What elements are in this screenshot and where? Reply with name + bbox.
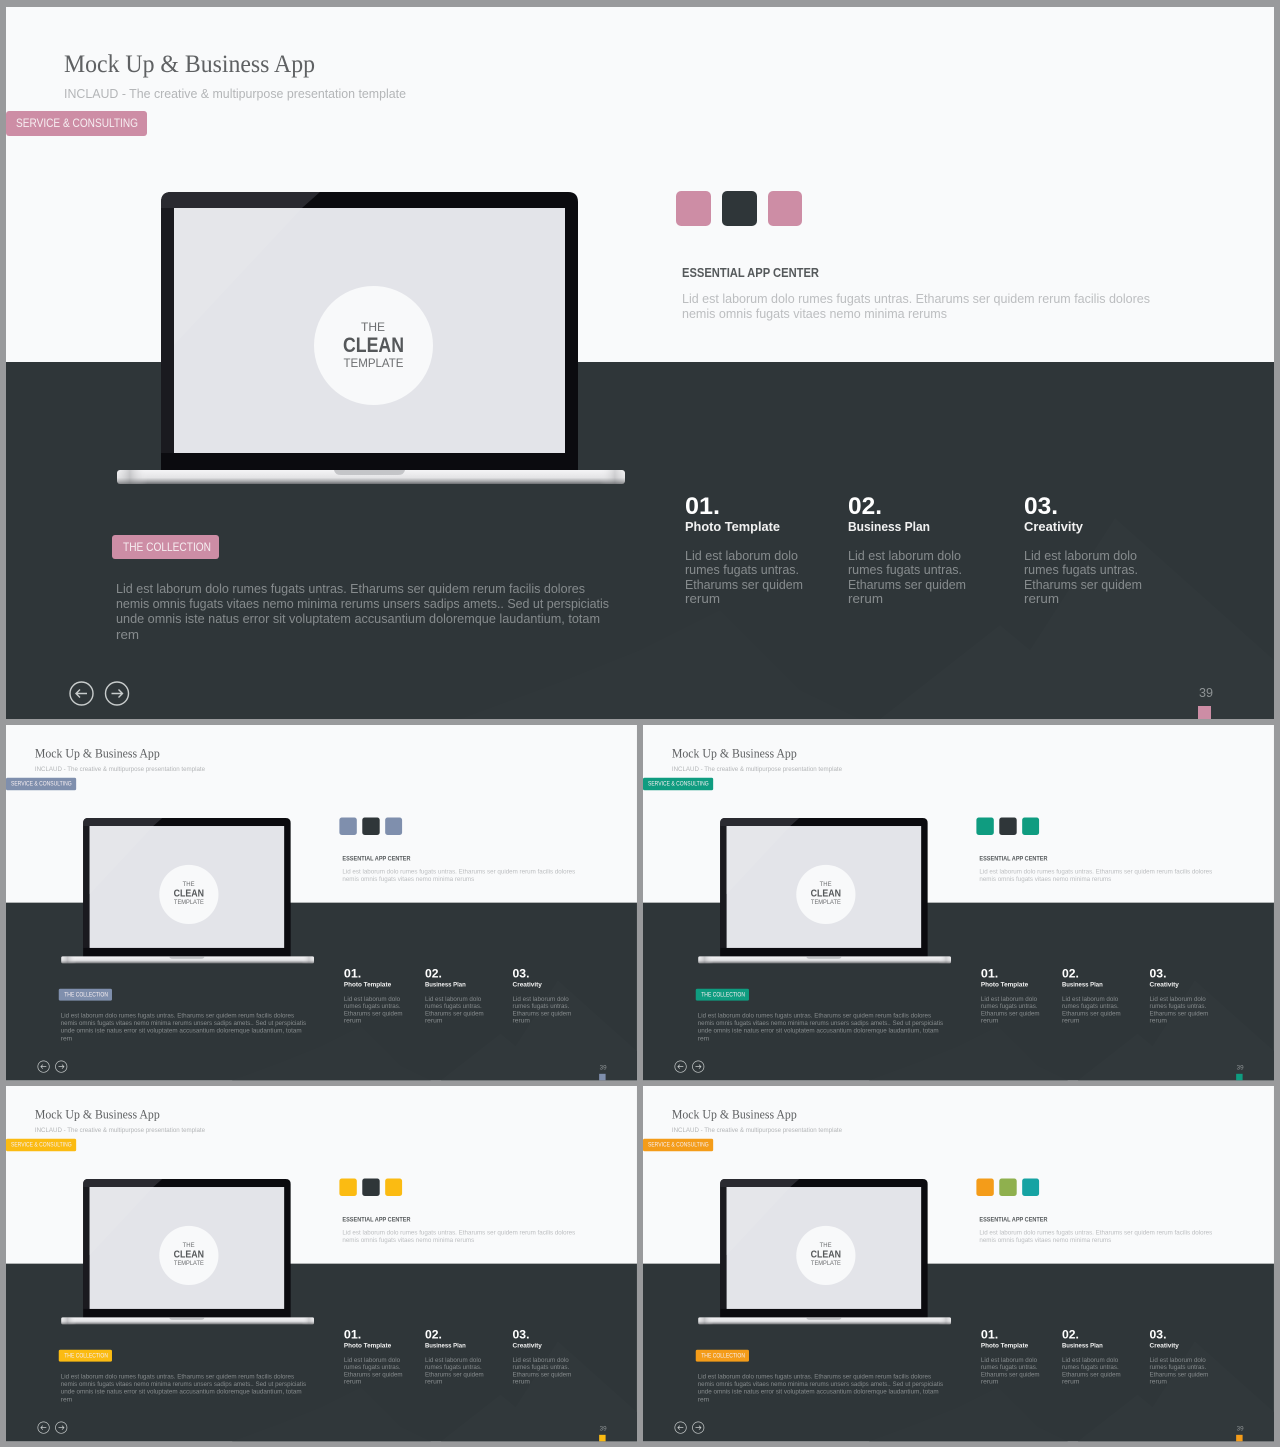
subtitle: INCLAUD - The creative & multipurpose presentation template <box>672 766 843 773</box>
screen badge: the clean template: CLEAN <box>343 334 404 357</box>
column 03: rerum <box>513 1379 530 1386</box>
essential app center text: ESSENTIAL APP CENTER <box>342 1216 411 1223</box>
column 01: rumes fugats untras. <box>344 1364 401 1371</box>
laptop mockup <box>698 1179 951 1324</box>
essential app center text: nemis omnis fugats vitaes nemo minima rerums <box>342 1237 474 1244</box>
colour swatches <box>339 818 402 835</box>
column 03: Creativity <box>1150 1343 1179 1350</box>
column 01 <box>981 1327 1040 1386</box>
column 03: Lid est laborum dolo <box>1150 1357 1206 1364</box>
column 02: 02. <box>1062 966 1079 980</box>
badge: the collection: THE COLLECTION <box>64 1354 108 1360</box>
column 03: rerum <box>1150 1379 1167 1386</box>
column 03: 03. <box>513 1327 529 1341</box>
collection paragraph: Lid est laborum dolo rumes fugats untras. Etharums ser quidem rerum facilis dolores <box>116 581 585 596</box>
icon: previous and next arrows <box>675 1422 704 1433</box>
column 01: rerum <box>685 591 720 606</box>
column 02 <box>425 1327 484 1386</box>
essential app center text <box>342 1216 575 1244</box>
column 02: Lid est laborum dolo <box>425 1357 482 1364</box>
column 03: rumes fugats untras. <box>1150 1003 1206 1010</box>
collection paragraph: rem <box>61 1035 72 1042</box>
column 03: rumes fugats untras. <box>513 1003 569 1010</box>
column 02: rerum <box>1062 1018 1079 1025</box>
screen badge: the clean template <box>159 1226 218 1285</box>
column 01 <box>344 966 403 1025</box>
collection paragraph: unde omnis iste natus error sit voluptatem accusantium doloremque laudantium, totam <box>61 1028 302 1035</box>
page number: 39 <box>600 1064 607 1071</box>
subtitle: INCLAUD - The creative & multipurpose presentation template <box>672 1127 843 1134</box>
screen badge: the clean template: CLEAN <box>174 889 204 900</box>
column 02 <box>1062 1327 1121 1386</box>
column 01: rumes fugats untras. <box>344 1003 401 1010</box>
screen badge: the clean template: TEMPLATE <box>174 900 204 906</box>
collection paragraph: unde omnis iste natus error sit voluptatem accusantium doloremque laudantium, totam <box>116 611 600 626</box>
column 02: Etharums ser quidem <box>1062 1372 1121 1379</box>
collection paragraph: nemis omnis fugats vitaes nemo minima rerums unsers sadips amets.. Sed ut perspiciatis <box>61 1381 306 1388</box>
column 02: 02. <box>425 1327 442 1341</box>
badge: the collection: THE COLLECTION <box>64 993 108 999</box>
screen badge: the clean template <box>159 865 218 924</box>
column 02: Lid est laborum dolo <box>425 996 482 1003</box>
column 03: Etharums ser quidem <box>513 1372 571 1379</box>
essential app center text: Lid est laborum dolo rumes fugats untras. Etharums ser quidem rerum facilis dolores <box>342 1229 575 1236</box>
column 03: rerum <box>1024 591 1059 606</box>
column 01 <box>685 493 803 606</box>
badge: service and consulting <box>6 778 76 790</box>
laptop mockup <box>61 818 314 963</box>
column 01: Lid est laborum dolo <box>685 548 798 563</box>
essential app center text: Lid est laborum dolo rumes fugats untras. Etharums ser quidem rerum facilis dolores <box>682 291 1150 306</box>
column 01: Photo Template <box>344 982 392 989</box>
screen badge: the clean template: TEMPLATE <box>344 356 404 370</box>
essential app center text: Lid est laborum dolo rumes fugats untras. Etharums ser quidem rerum facilis dolores <box>979 1229 1212 1236</box>
badge: service and consulting: SERVICE & CONSULTING <box>16 116 138 130</box>
column 03 <box>1150 966 1208 1025</box>
laptop mockup <box>698 818 951 963</box>
column 02: Etharums ser quidem <box>1062 1011 1121 1018</box>
column 03: 03. <box>1150 966 1166 980</box>
column 01: Photo Template <box>981 1343 1029 1350</box>
column 02: rerum <box>848 591 883 606</box>
badge: service and consulting <box>643 1139 713 1151</box>
essential app center text <box>979 855 1212 883</box>
page number <box>599 1425 607 1441</box>
column 01: rerum <box>981 1379 998 1386</box>
column 02: 02. <box>848 493 882 520</box>
column 03: rerum <box>513 1018 530 1025</box>
column 03: Lid est laborum dolo <box>513 1357 569 1364</box>
collection paragraph: nemis omnis fugats vitaes nemo minima rerums unsers sadips amets.. Sed ut perspiciatis <box>698 1381 943 1388</box>
column 02: rumes fugats untras. <box>425 1364 482 1371</box>
column 01: Lid est laborum dolo <box>344 996 400 1003</box>
column 03: 03. <box>1024 493 1058 520</box>
essential app center text <box>682 266 1150 321</box>
essential app center text: ESSENTIAL APP CENTER <box>342 855 411 862</box>
screen badge: the clean template: TEMPLATE <box>811 900 841 906</box>
column 01: Photo Template <box>344 1343 392 1350</box>
badge: service and consulting <box>6 1139 76 1151</box>
screen badge: the clean template: CLEAN <box>811 889 841 900</box>
column 01: Lid est laborum dolo <box>981 996 1037 1003</box>
column 02: Business Plan <box>425 982 466 989</box>
colour swatches <box>339 1179 402 1196</box>
page number <box>599 1064 607 1080</box>
badge: the collection <box>59 989 112 1001</box>
icon: previous and next arrows <box>38 1061 67 1072</box>
badge: service and consulting: SERVICE & CONSULTING <box>11 1143 72 1149</box>
slide: orange <box>643 1086 1274 1441</box>
page number: 39 <box>1237 1064 1244 1071</box>
essential app center text <box>979 1216 1212 1244</box>
column 02: rerum <box>1062 1379 1079 1386</box>
page number <box>1236 1425 1244 1441</box>
badge: the collection: THE COLLECTION <box>701 993 745 999</box>
column 01: Photo Template <box>685 519 780 534</box>
column 01: Etharums ser quidem <box>685 577 803 592</box>
laptop mockup <box>61 1179 314 1324</box>
title: Mock Up & Business App <box>35 1107 160 1121</box>
column 03: Etharums ser quidem <box>513 1011 571 1018</box>
column 03: rerum <box>1150 1018 1167 1025</box>
column 03 <box>513 966 571 1025</box>
slide: slate blue <box>6 725 637 1080</box>
column 01 <box>344 1327 403 1386</box>
essential app center text: nemis omnis fugats vitaes nemo minima rerums <box>979 1237 1111 1244</box>
badge: the collection <box>112 535 219 559</box>
column 02: rumes fugats untras. <box>848 562 962 577</box>
badge: service and consulting: SERVICE & CONSULTING <box>11 782 72 788</box>
screen badge: the clean template: THE <box>361 320 385 334</box>
page number: 39 <box>1199 685 1213 700</box>
column 03: Lid est laborum dolo <box>513 996 569 1003</box>
column 01: 01. <box>981 966 998 980</box>
essential app center text: nemis omnis fugats vitaes nemo minima rerums <box>682 306 947 321</box>
screen badge: the clean template: CLEAN <box>174 1250 204 1261</box>
screen badge: the clean template: THE <box>183 882 195 888</box>
title: Mock Up & Business App <box>64 51 315 78</box>
collection paragraph: nemis omnis fugats vitaes nemo minima rerums unsers sadips amets.. Sed ut perspiciatis <box>698 1020 943 1027</box>
slide: green <box>643 725 1274 1080</box>
column 02: rumes fugats untras. <box>425 1003 482 1010</box>
colour swatches <box>976 1179 1039 1196</box>
column 01: Photo Template <box>981 982 1029 989</box>
page number: 39 <box>600 1425 607 1432</box>
screen badge: the clean template <box>796 1226 855 1285</box>
essential app center text: ESSENTIAL APP CENTER <box>682 266 819 280</box>
page number <box>1236 1064 1244 1080</box>
column 01: rumes fugats untras. <box>981 1364 1038 1371</box>
screen badge: the clean template: TEMPLATE <box>811 1261 841 1267</box>
badge: service and consulting <box>6 111 147 136</box>
column 03: 03. <box>513 966 529 980</box>
collection paragraph <box>116 581 609 642</box>
essential app center text <box>342 855 575 883</box>
collection paragraph: nemis omnis fugats vitaes nemo minima rerums unsers sadips amets.. Sed ut perspiciatis <box>61 1020 306 1027</box>
column 02: Lid est laborum dolo <box>1062 996 1119 1003</box>
column 03: Creativity <box>1150 982 1179 989</box>
column 02 <box>848 493 966 606</box>
column 03 <box>1024 493 1142 606</box>
column 01: rerum <box>981 1018 998 1025</box>
column 02: Etharums ser quidem <box>425 1011 484 1018</box>
subtitle: INCLAUD - The creative & multipurpose presentation template <box>64 87 406 101</box>
column 02: rerum <box>425 1379 442 1386</box>
collection paragraph: Lid est laborum dolo rumes fugats untras. Etharums ser quidem rerum facilis dolores <box>698 1374 931 1381</box>
column 01: rumes fugats untras. <box>981 1003 1038 1010</box>
column 02: rumes fugats untras. <box>1062 1364 1119 1371</box>
badge: the collection <box>59 1350 112 1362</box>
column 02 <box>425 966 484 1025</box>
column 01: 01. <box>981 1327 998 1341</box>
column 01: Lid est laborum dolo <box>981 1357 1037 1364</box>
column 02: Business Plan <box>425 1343 466 1350</box>
collection paragraph: nemis omnis fugats vitaes nemo minima rerums unsers sadips amets.. Sed ut perspiciatis <box>116 596 609 611</box>
essential app center text: Lid est laborum dolo rumes fugats untras. Etharums ser quidem rerum facilis dolores <box>979 868 1212 875</box>
column 03 <box>513 1327 571 1386</box>
screen badge: the clean template: THE <box>820 1243 832 1249</box>
column 01: 01. <box>344 966 361 980</box>
column 03: Creativity <box>513 1343 542 1350</box>
title: Mock Up & Business App <box>672 746 797 760</box>
column 03: rumes fugats untras. <box>1150 1364 1206 1371</box>
collection paragraph: unde omnis iste natus error sit voluptatem accusantium doloremque laudantium, totam <box>61 1389 302 1396</box>
title: Mock Up & Business App <box>35 746 160 760</box>
collection paragraph: Lid est laborum dolo rumes fugats untras. Etharums ser quidem rerum facilis dolores <box>61 1013 294 1020</box>
badge: the collection <box>696 989 749 1001</box>
collection paragraph <box>61 1013 306 1042</box>
essential app center text: nemis omnis fugats vitaes nemo minima rerums <box>979 876 1111 883</box>
column 01: rerum <box>344 1379 361 1386</box>
column 02: Business Plan <box>848 519 930 534</box>
badge: service and consulting: SERVICE & CONSULTING <box>648 1143 709 1149</box>
column 03: Creativity <box>1024 519 1084 534</box>
column 02: rerum <box>425 1018 442 1025</box>
colour swatches <box>676 191 802 226</box>
collection paragraph: rem <box>61 1396 72 1403</box>
badge: the collection <box>696 1350 749 1362</box>
column 03: Etharums ser quidem <box>1024 577 1142 592</box>
essential app center text: nemis omnis fugats vitaes nemo minima rerums <box>342 876 474 883</box>
badge: the collection: THE COLLECTION <box>701 1354 745 1360</box>
collection paragraph: rem <box>698 1035 709 1042</box>
column 01: rumes fugats untras. <box>685 562 799 577</box>
laptop mockup <box>117 192 625 484</box>
badge: the collection: THE COLLECTION <box>123 540 211 554</box>
icon: previous and next arrows <box>675 1061 704 1072</box>
essential app center text: Lid est laborum dolo rumes fugats untras. Etharums ser quidem rerum facilis dolores <box>342 868 575 875</box>
column 02: Lid est laborum dolo <box>848 548 961 563</box>
column 03: rumes fugats untras. <box>513 1364 569 1371</box>
column 03: Creativity <box>513 982 542 989</box>
column 03: Lid est laborum dolo <box>1024 548 1137 563</box>
column 02: Business Plan <box>1062 1343 1103 1350</box>
screen badge: the clean template <box>314 286 433 405</box>
column 02 <box>1062 966 1121 1025</box>
icon: previous and next arrows <box>38 1422 67 1433</box>
colour swatches <box>976 818 1039 835</box>
page number <box>1198 685 1213 719</box>
column 03: 03. <box>1150 1327 1166 1341</box>
collection paragraph: rem <box>116 627 139 642</box>
column 02: 02. <box>1062 1327 1079 1341</box>
screen badge: the clean template: TEMPLATE <box>174 1261 204 1267</box>
column 02: Lid est laborum dolo <box>1062 1357 1119 1364</box>
collection paragraph: unde omnis iste natus error sit voluptatem accusantium doloremque laudantium, totam <box>698 1028 939 1035</box>
collection paragraph: Lid est laborum dolo rumes fugats untras. Etharums ser quidem rerum facilis dolores <box>61 1374 294 1381</box>
column 03 <box>1150 1327 1208 1386</box>
essential app center text: ESSENTIAL APP CENTER <box>979 1216 1048 1223</box>
column 01 <box>981 966 1040 1025</box>
subtitle: INCLAUD - The creative & multipurpose presentation template <box>35 766 206 773</box>
column 01: Lid est laborum dolo <box>344 1357 400 1364</box>
column 03: rumes fugats untras. <box>1024 562 1138 577</box>
page number: 39 <box>1237 1425 1244 1432</box>
badge: service and consulting: SERVICE & CONSULTING <box>648 782 709 788</box>
screen badge: the clean template: CLEAN <box>811 1250 841 1261</box>
column 02: Business Plan <box>1062 982 1103 989</box>
column 01: Etharums ser quidem <box>344 1011 403 1018</box>
column 03: Etharums ser quidem <box>1150 1372 1208 1379</box>
slide: pink (large) <box>6 7 1274 719</box>
column 02: Etharums ser quidem <box>848 577 966 592</box>
subtitle: INCLAUD - The creative & multipurpose presentation template <box>35 1127 206 1134</box>
collection paragraph <box>698 1374 943 1403</box>
screen badge: the clean template: THE <box>820 882 832 888</box>
column 02: 02. <box>425 966 442 980</box>
column 01: 01. <box>344 1327 361 1341</box>
screen badge: the clean template: THE <box>183 1243 195 1249</box>
collection paragraph <box>61 1374 306 1403</box>
column 01: 01. <box>685 493 720 520</box>
collection paragraph: Lid est laborum dolo rumes fugats untras. Etharums ser quidem rerum facilis dolores <box>698 1013 931 1020</box>
collection paragraph: unde omnis iste natus error sit voluptatem accusantium doloremque laudantium, totam <box>698 1389 939 1396</box>
column 01: Etharums ser quidem <box>981 1011 1040 1018</box>
column 03: Lid est laborum dolo <box>1150 996 1206 1003</box>
title: Mock Up & Business App <box>672 1107 797 1121</box>
column 03: Etharums ser quidem <box>1150 1011 1208 1018</box>
slide: yellow <box>6 1086 637 1441</box>
column 02: Etharums ser quidem <box>425 1372 484 1379</box>
column 01: Etharums ser quidem <box>981 1372 1040 1379</box>
collection paragraph <box>698 1013 943 1042</box>
column 01: rerum <box>344 1018 361 1025</box>
badge: service and consulting <box>643 778 713 790</box>
collection paragraph: rem <box>698 1396 709 1403</box>
screen badge: the clean template <box>796 865 855 924</box>
essential app center text: ESSENTIAL APP CENTER <box>979 855 1048 862</box>
column 01: Etharums ser quidem <box>344 1372 403 1379</box>
icon: previous and next arrows <box>70 682 128 705</box>
column 02: rumes fugats untras. <box>1062 1003 1119 1010</box>
